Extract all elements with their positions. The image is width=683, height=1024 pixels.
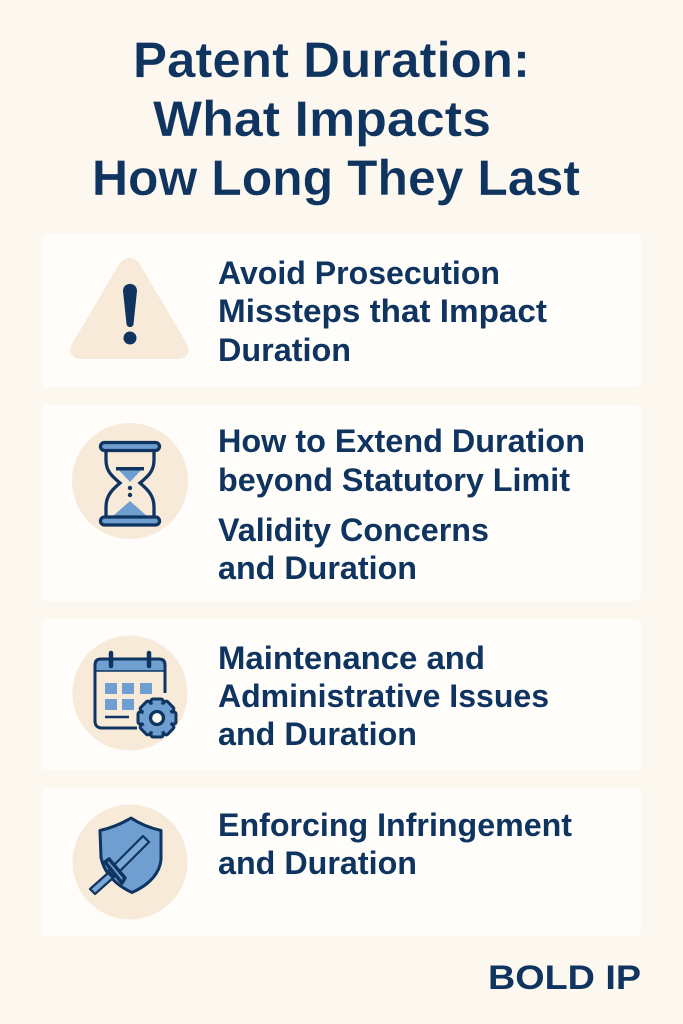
- panel: extending duration and validity: [41, 405, 641, 601]
- icon: shield and sword: [72, 804, 188, 920]
- text: maintenance: and Duration: [218, 716, 417, 752]
- text: enforcing infringement: and Duration: [218, 845, 417, 881]
- logo: BOLD IP: BOLD IP: [488, 959, 641, 997]
- text: prosecution missteps: [218, 255, 547, 368]
- panel: prosecution missteps: [41, 234, 641, 387]
- text: extend duration: beyond Statutory Limit: [218, 462, 570, 498]
- icon: calendar with gear: [72, 636, 188, 750]
- title: [92, 32, 580, 206]
- text: validity concerns: and Duration: [218, 550, 417, 586]
- title: How Long They Last: [92, 150, 580, 206]
- text: prosecution missteps: Missteps that Impact: [218, 293, 547, 329]
- icon: gear: [138, 699, 176, 737]
- title: Patent Duration:: [133, 32, 530, 88]
- text: extend duration: [218, 423, 585, 498]
- icon: warning triangle: [70, 258, 189, 359]
- text: prosecution missteps: Avoid Prosecution: [218, 255, 500, 291]
- panel: enforcing infringement: [41, 788, 641, 936]
- icon: hourglass: [72, 423, 188, 539]
- text: maintenance: Administrative Issues: [218, 678, 549, 714]
- text: validity concerns: Validity Concerns: [218, 512, 489, 548]
- text: extend duration: How to Extend Duration: [218, 423, 585, 459]
- text: validity concerns: [218, 512, 489, 586]
- panel: maintenance: [41, 619, 641, 770]
- text: maintenance: [218, 640, 549, 752]
- text: prosecution missteps: Duration: [218, 332, 351, 368]
- text: enforcing infringement: [218, 807, 572, 881]
- text: enforcing infringement: Enforcing Infringement: [218, 807, 572, 843]
- title: What Impacts: [153, 91, 491, 147]
- text: maintenance: Maintenance and: [218, 640, 485, 676]
